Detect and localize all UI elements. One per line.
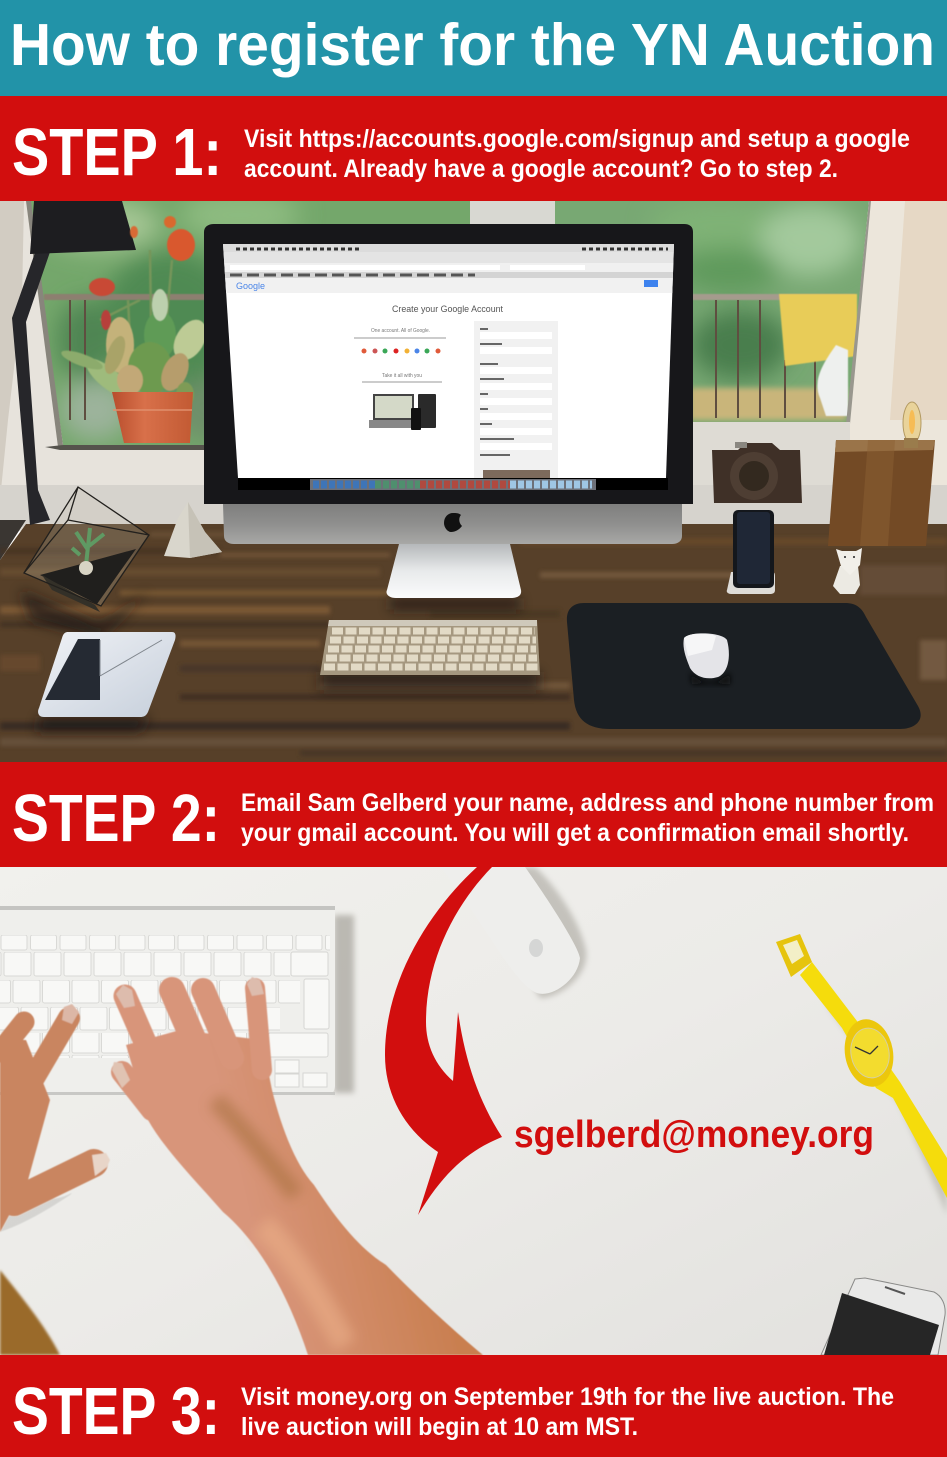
- step 3 instructions: [241, 1383, 894, 1441]
- step 2 label: STEP 2:: [12, 781, 220, 856]
- title banner: [0, 0, 947, 96]
- window views: [28, 190, 869, 445]
- step 1 instructions: account. Already have a google account? Go to step 2.: [244, 155, 838, 183]
- dock: [310, 479, 596, 490]
- email address: sgelberd@money.org: [514, 1114, 874, 1156]
- white lantern outside: [817, 345, 848, 416]
- photo: hands typing on white desk: [0, 867, 947, 1355]
- desk lamp: [12, 201, 136, 525]
- yellow towel on balcony: [779, 294, 857, 366]
- keyboard: [0, 906, 354, 1095]
- step 3 label: STEP 3:: [12, 1374, 220, 1449]
- bear figurine: [833, 548, 862, 594]
- screen: Google account page: Google: [236, 281, 265, 291]
- monitor: [204, 224, 693, 598]
- panel: step 1 banner: [0, 96, 947, 201]
- step 3 instructions: Visit money.org on September 19th for the live auction. The: [241, 1383, 894, 1411]
- glass terrarium: [24, 487, 149, 612]
- woman hair: [0, 1270, 60, 1355]
- screen: Google account page: [223, 244, 674, 490]
- wooden lamp block: [828, 402, 935, 546]
- left hand: [0, 1004, 110, 1232]
- mouse: [525, 867, 589, 1000]
- wooden desk: [0, 520, 947, 762]
- object shadows: [20, 590, 540, 732]
- phone on dock: [727, 510, 775, 594]
- tablet: [38, 632, 176, 717]
- red arrow: [385, 867, 502, 1215]
- panel: step 3 banner: [0, 1355, 947, 1457]
- right hand and arm: [112, 977, 483, 1355]
- step 2 instructions: [241, 789, 934, 847]
- step 1 label: STEP 1:: [12, 115, 222, 190]
- camera: [712, 442, 802, 503]
- step 1 instructions: Visit https://accounts.google.com/signup and setup a google: [244, 125, 910, 153]
- yellow watch: [776, 934, 947, 1215]
- panel: step 2 banner: [0, 762, 947, 867]
- potted plant: [59, 216, 213, 443]
- screen: Google account page: Take it all with you: [382, 373, 422, 379]
- mouse: [683, 633, 730, 684]
- screen: Google account page: Create your Google Account: [392, 304, 503, 315]
- window frame: [28, 220, 204, 458]
- photo: desk with computer showing Google signup: [0, 190, 947, 762]
- screen: Google account page: One account. All of Google.: [371, 328, 430, 334]
- step 2 instructions: your gmail account. You will get a confirmation email shortly.: [241, 819, 909, 847]
- mouse pad: [567, 603, 921, 729]
- step 3 instructions: live auction will begin at 10 am MST.: [241, 1413, 638, 1441]
- title: How to register for the YN Auction: [10, 12, 935, 78]
- step 1 instructions: [244, 125, 910, 183]
- smartphone: [821, 1278, 945, 1355]
- keyboard: [320, 620, 540, 675]
- rock sculpture: [164, 502, 222, 558]
- window sill: [0, 485, 947, 527]
